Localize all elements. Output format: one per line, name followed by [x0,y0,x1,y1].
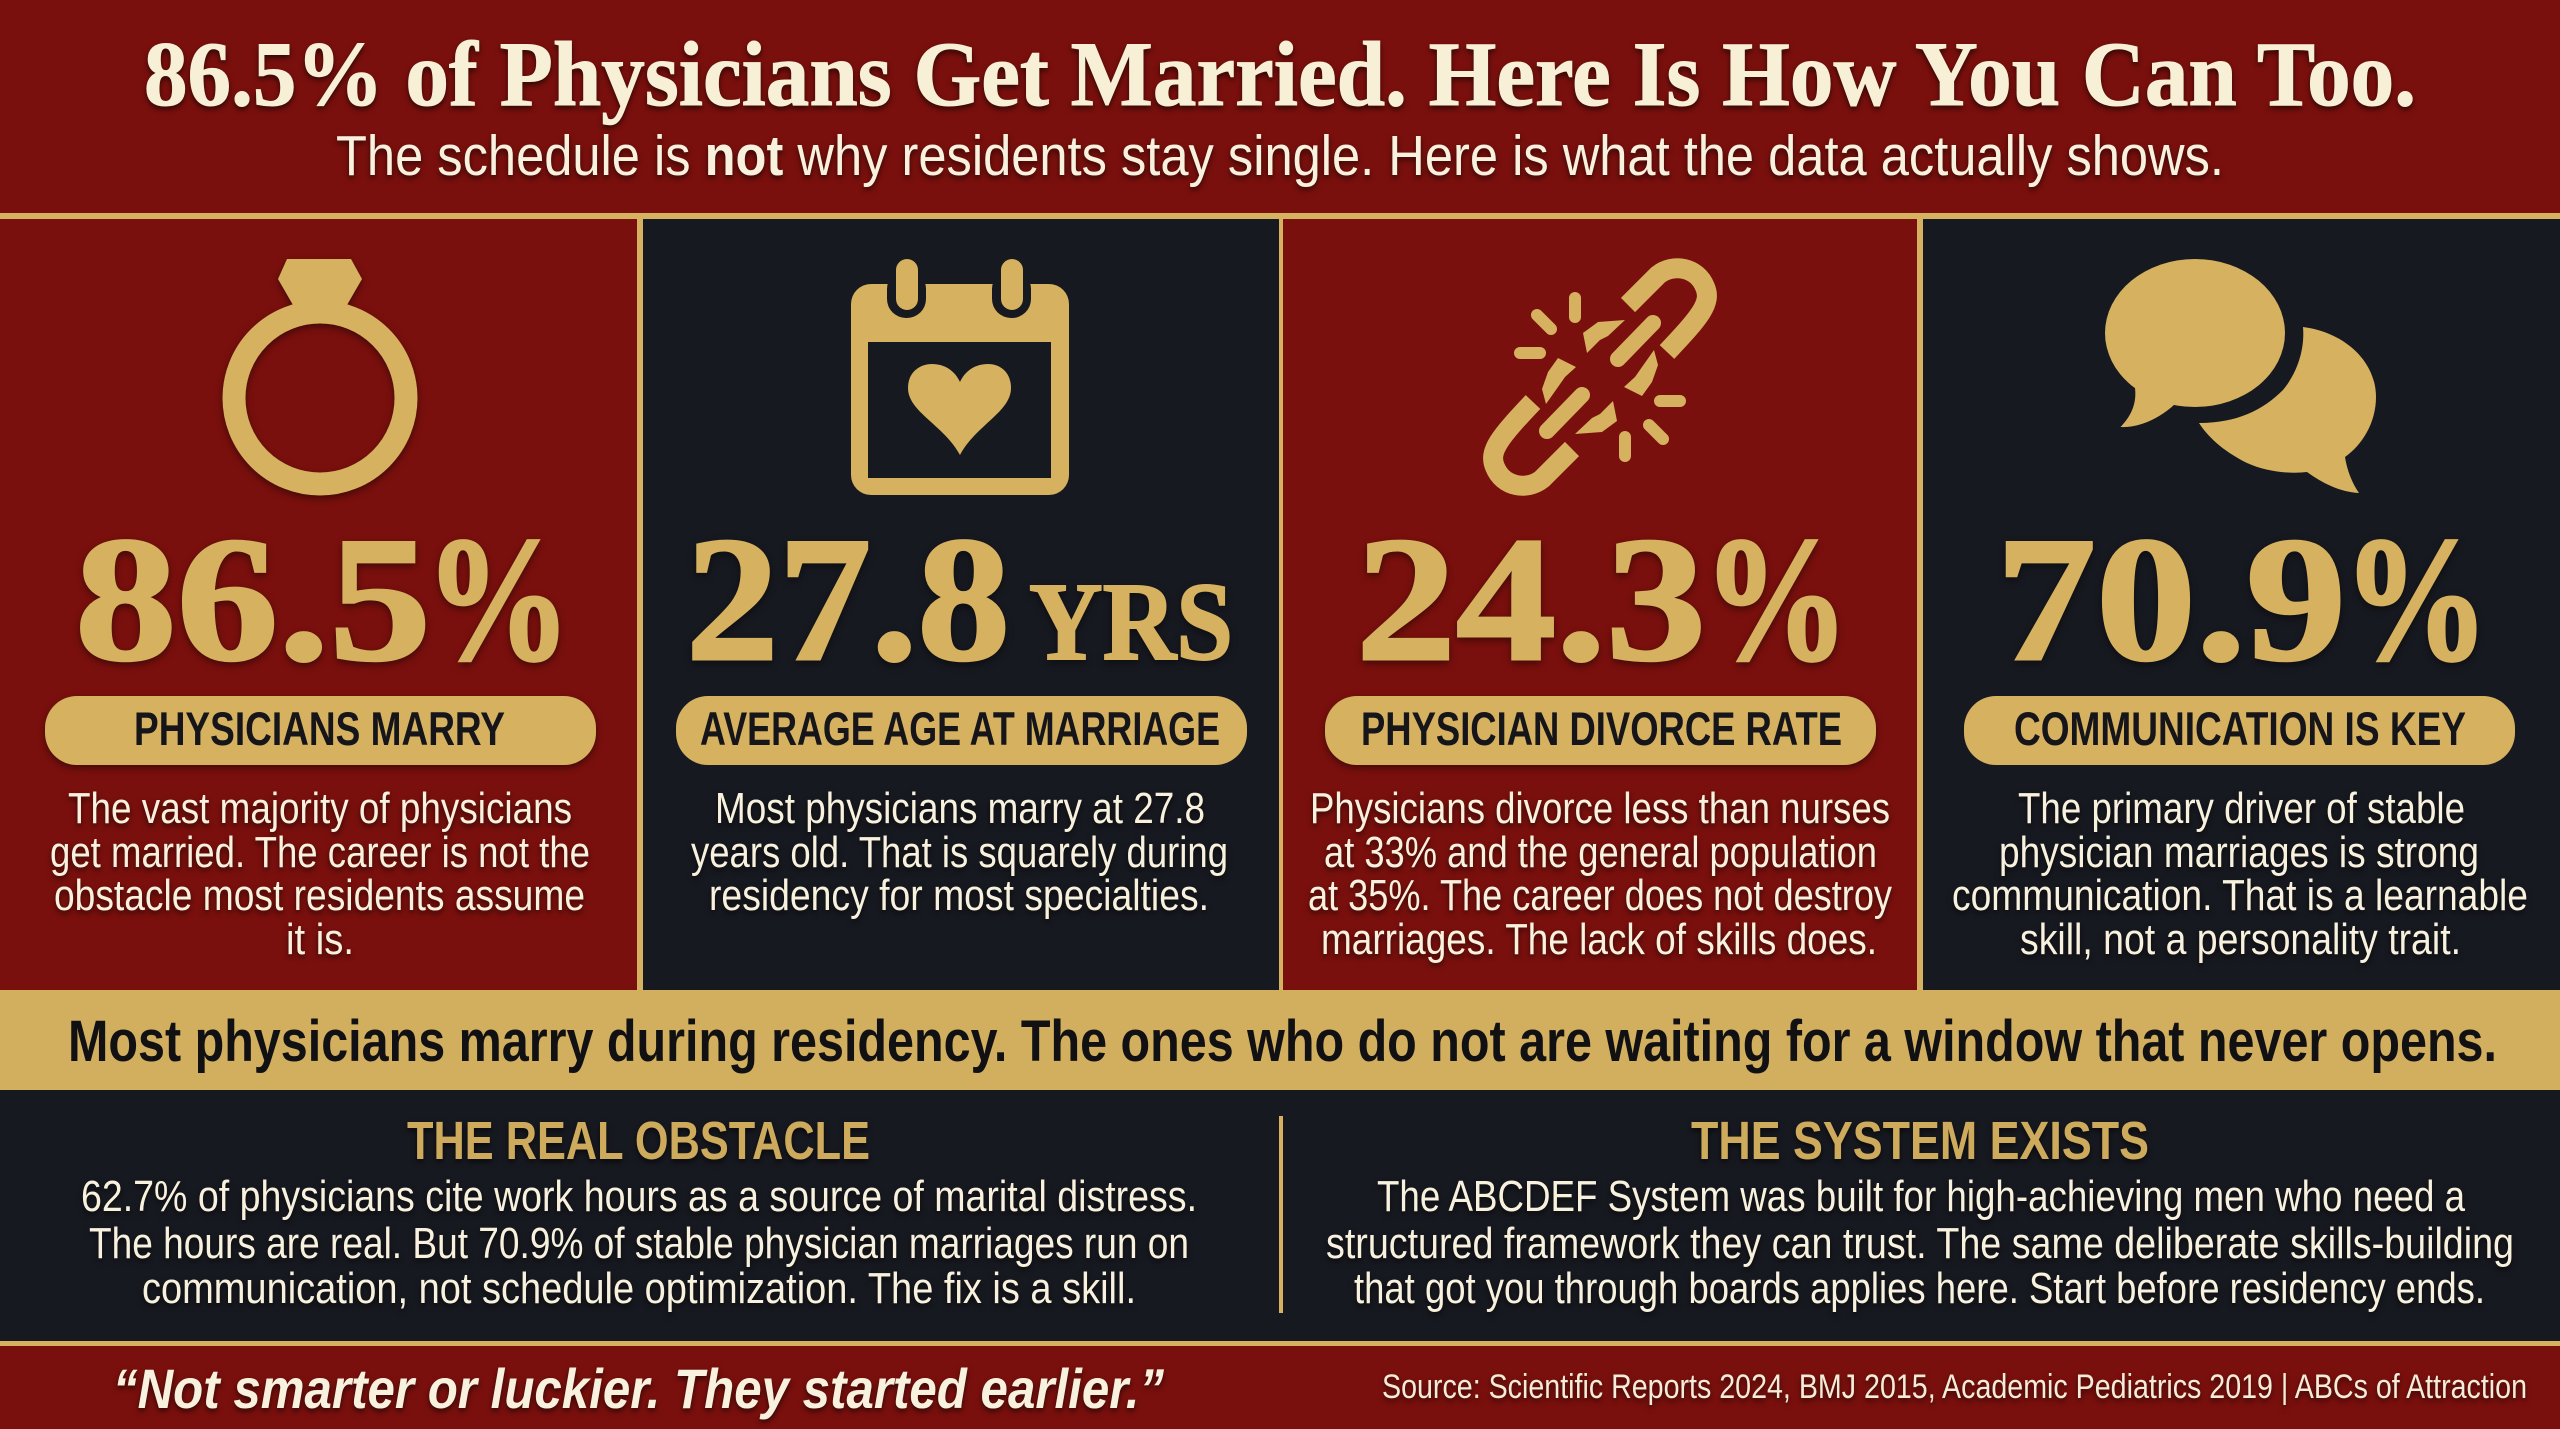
stat: 86.5%: 86.5 [75,500,431,698]
text: physicians marry description: get married. The career is not the [50,828,590,877]
stat: 27.8 yrs [686,500,1233,698]
title: 86.5% of Physicians Get Married. Here Is How You Can Too. [144,23,2416,125]
text: communication description [1952,784,2528,964]
callout band [0,990,2560,1090]
label pill: physicians marry [45,696,596,765]
text: divorce rate description: at 35%. The career does not destroy [1308,871,1892,920]
text: average age description: years old. That is squarely during [691,828,1228,877]
text: divorce rate description: Physicians divorce less than nurses [1310,784,1890,833]
stat: 24.3%: % [1703,500,1849,698]
icon: broken chain [1493,268,1707,486]
text: divorce rate description: marriages. The lack of skills does. [1321,915,1877,964]
panel: physician divorce rate [1283,219,1917,991]
stat: 27.8 yrs: YRS [1029,561,1233,684]
quote: “Not smarter or luckier. They started earlier.” [113,1357,1164,1420]
header panel [0,0,2560,216]
stat: 24.3%: 24.3 [1356,500,1706,698]
text: divorce rate description: at 33% and the general population [1324,828,1877,877]
section: the system exists [1326,1111,2514,1313]
stat: 70.9%: 70.9 [1996,500,2346,698]
label pill: communication [1964,696,2515,765]
section: the system exists: THE SYSTEM EXISTS [1691,1111,2149,1171]
subtitle: The schedule is not why residents stay single. Here is what the data actually shows. [336,124,2224,188]
label pill: average age: AVERAGE AGE AT MARRIAGE [700,702,1220,755]
panel: average age at marriage [643,219,1280,991]
section: the real obstacle: THE REAL OBSTACLE [407,1111,870,1171]
panel: communication is key [1923,219,2560,991]
section: the real obstacle: The hours are real. But 70.9% of stable physician marriages run on [89,1219,1189,1268]
label pill: average age [676,696,1247,765]
icon: speech bubbles [2105,259,2376,493]
panel: physicians marry [0,219,637,991]
text: communication description: physician marriages is strong [1999,828,2479,877]
text: communication description: The primary driver of stable [2018,784,2465,833]
text: communication description: skill, not a personality trait. [2020,915,2461,964]
text: average age description: Most physicians marry at 27.8 [715,784,1205,833]
stat: 86.5%: % [425,500,571,698]
text: physicians marry description [50,784,590,964]
icon: diamond ring [234,259,406,484]
label pill: physicians marry: PHYSICIANS MARRY [134,702,505,755]
text: physicians marry description: obstacle most residents assume [54,871,585,920]
section: the real obstacle: communication, not schedule optimization. The fix is a skill. [142,1264,1136,1313]
stat: 27.8 yrs: 27.8 [686,500,1010,698]
label pill: divorce rate: PHYSICIAN DIVORCE RATE [1361,702,1842,755]
stat: 70.9%: % [2343,500,2489,698]
text: average age description [691,784,1228,920]
icon: calendar with heart [851,259,1069,495]
footer panel [0,1346,2560,1429]
label pill: divorce rate [1325,696,1876,765]
text: divorce rate description [1308,784,1892,964]
panel: bottom dark section [0,1090,2560,1342]
section: the real obstacle: 62.7% of physicians cite work hours as a source of marital distress. [81,1172,1197,1221]
text: physicians marry description: it is. [286,915,354,964]
section: the real obstacle [81,1111,1197,1313]
text: average age description: residency for most specialties. [709,871,1209,920]
text: physicians marry description: The vast majority of physicians [68,784,572,833]
